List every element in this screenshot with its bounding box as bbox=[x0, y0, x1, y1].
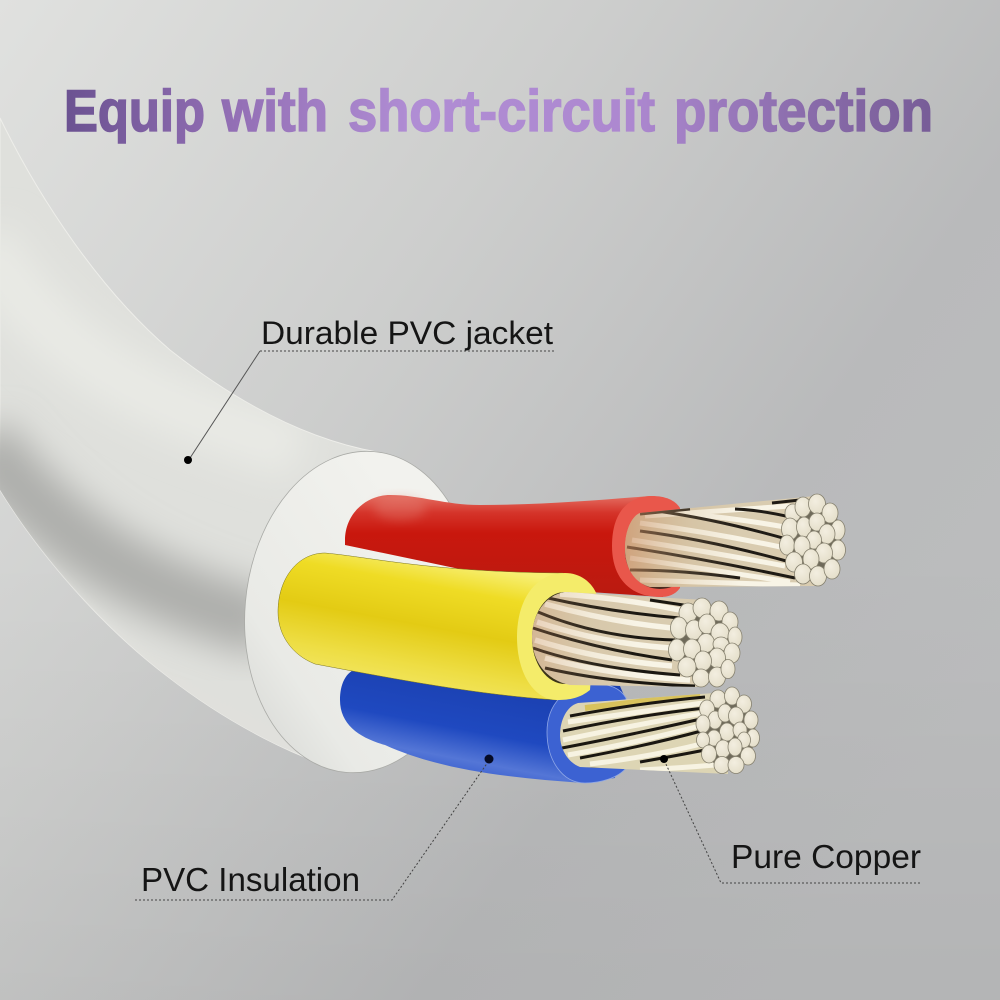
red strand end face bbox=[780, 494, 846, 586]
blue wire bbox=[340, 668, 760, 783]
yellow ring bbox=[517, 573, 597, 700]
label: Pure Copper bbox=[660, 755, 921, 883]
cable illustration bbox=[0, 118, 846, 783]
red ring bbox=[612, 496, 680, 597]
label: PVC Insulation: PVC Insulation bbox=[141, 861, 360, 898]
blue copper strands bbox=[560, 692, 728, 774]
blue insulation bbox=[340, 668, 626, 783]
label: Pure Copper: Pure Copper bbox=[731, 838, 921, 875]
title bbox=[64, 79, 933, 144]
red wire bbox=[345, 490, 846, 597]
title: protection bbox=[674, 79, 933, 144]
yellow copper strands bbox=[530, 590, 710, 690]
jacket end face bbox=[231, 442, 489, 782]
title: with bbox=[221, 79, 328, 144]
yellow insulation bbox=[278, 553, 597, 700]
title: Equip bbox=[64, 79, 205, 144]
yellow wire bbox=[278, 553, 742, 700]
blue ring bbox=[547, 684, 626, 783]
red insulation bbox=[345, 495, 663, 597]
blue strand end face bbox=[696, 687, 760, 774]
title: short-circuit bbox=[348, 79, 655, 144]
outer PVC jacket bbox=[0, 118, 378, 758]
yellow strand end face bbox=[668, 598, 742, 687]
label: Durable PVC jacket: Durable PVC jacket bbox=[261, 315, 553, 351]
red copper strands bbox=[625, 496, 815, 587]
label: PVC Insulation bbox=[135, 754, 494, 900]
label: Durable PVC jacket bbox=[184, 315, 554, 464]
